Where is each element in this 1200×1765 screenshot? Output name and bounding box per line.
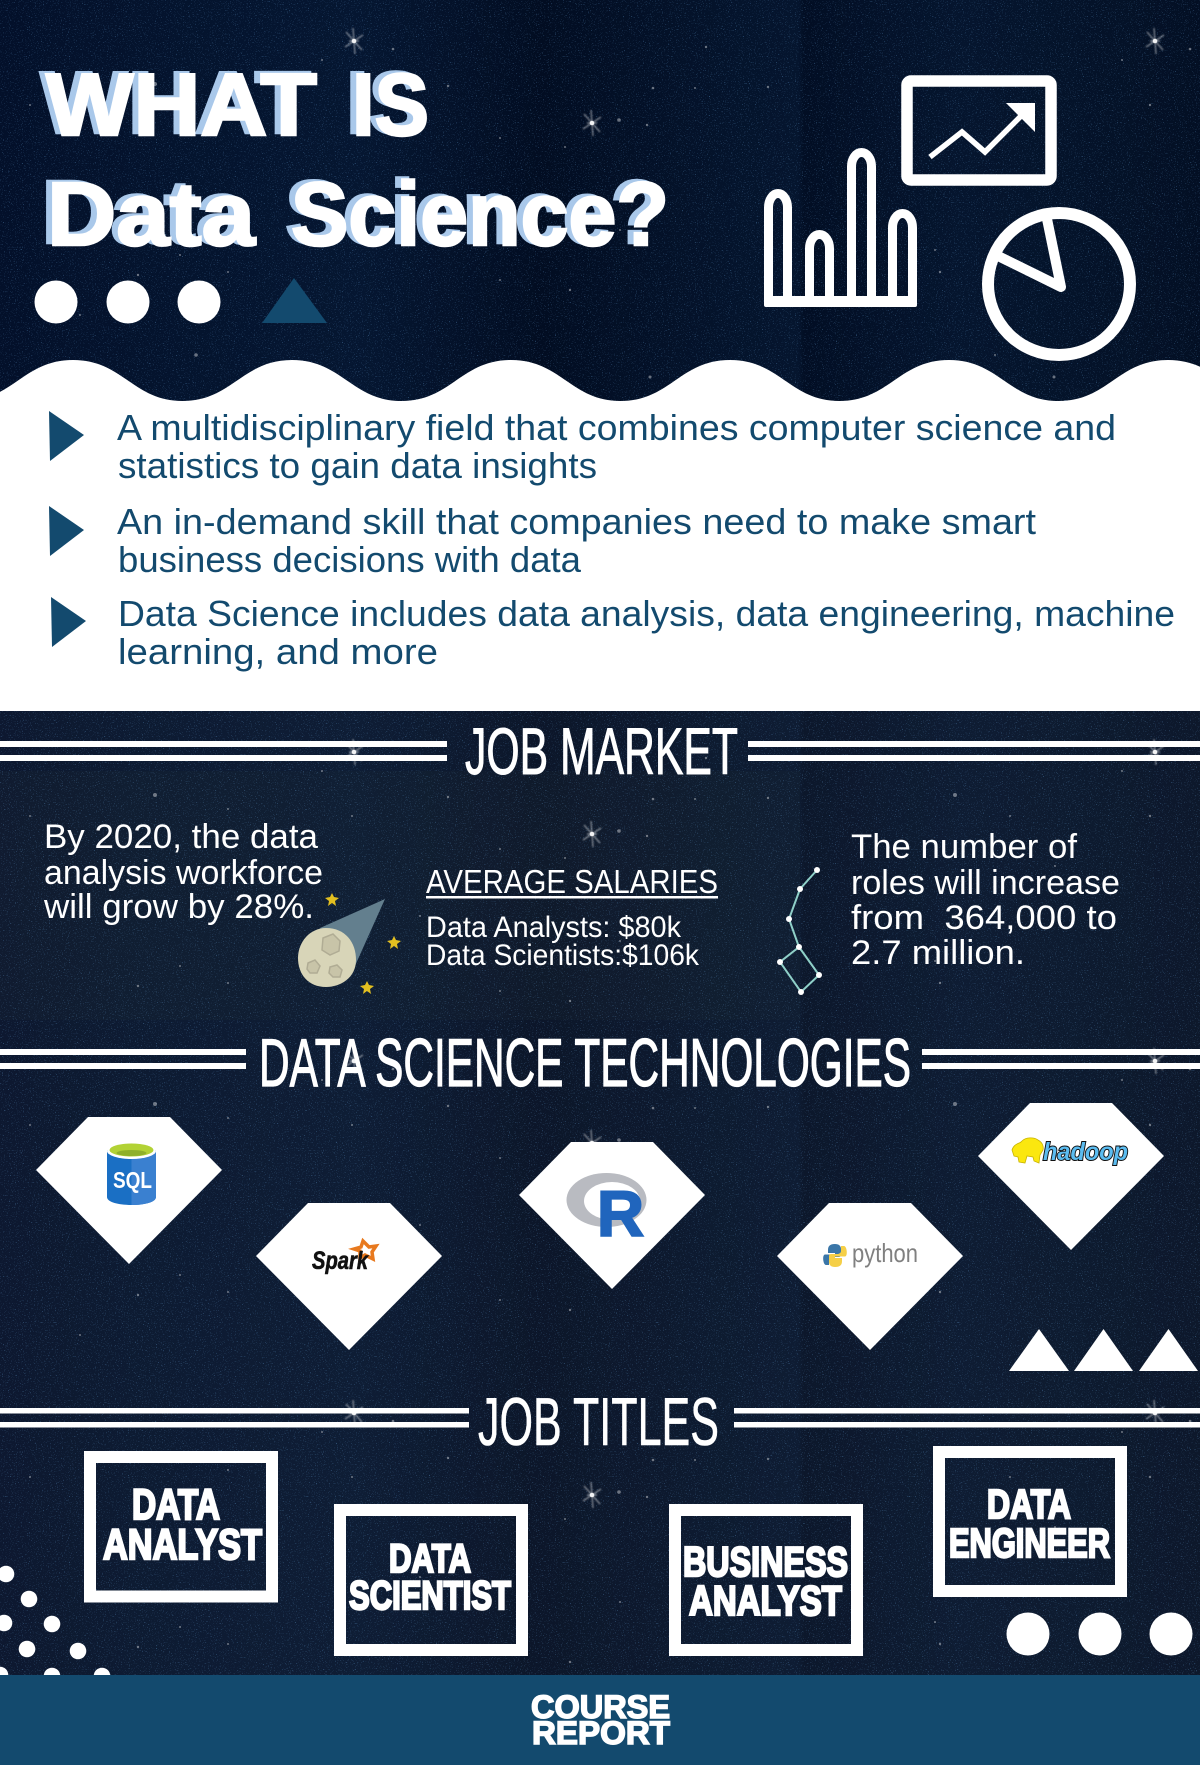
bullet 3: learning, and more xyxy=(118,631,438,672)
bullet 2: An in-demand skill that companies need to make smart xyxy=(117,501,1036,542)
title xyxy=(46,55,669,265)
decorative dots: bottom right xyxy=(1006,1612,1192,1656)
tech diamond: hadoop: hadoop xyxy=(1043,1138,1128,1166)
title: Data xyxy=(47,165,256,265)
average salaries: Data Analysts: $80k xyxy=(426,911,682,944)
icon: constellation xyxy=(777,867,822,995)
logo: course report: COURSE xyxy=(531,1689,670,1725)
heading: job titles: JOB TITLES xyxy=(478,1384,719,1460)
text: roles growth: 2.7 million. xyxy=(851,934,1025,972)
decorative triangles xyxy=(1009,1329,1198,1371)
bullet list xyxy=(49,407,1175,672)
text: roles growth: from 364,000 to xyxy=(851,899,1117,937)
job title: business analyst: BUSINESS xyxy=(683,1538,848,1585)
icon: comet xyxy=(298,893,401,994)
bullet 2: business decisions with data xyxy=(118,539,582,580)
title: Science? xyxy=(291,165,669,265)
job title: business analyst xyxy=(675,1510,857,1650)
tech diamond: python xyxy=(777,1203,963,1350)
bullet 1: A multidisciplinary field that combines computer science and xyxy=(117,407,1116,448)
white intro panel with wave edge xyxy=(0,360,1200,711)
job title: data scientist: SCIENTIST xyxy=(349,1574,511,1618)
job title: data engineer: DATA xyxy=(987,1481,1071,1527)
tech diamond: python: python xyxy=(852,1238,918,1268)
heading: job market xyxy=(0,714,1200,788)
job title: data analyst xyxy=(90,1457,272,1596)
tech diamond: Spark xyxy=(256,1203,442,1350)
tech diamond: R xyxy=(519,1142,705,1289)
icon: line chart monitor xyxy=(907,81,1051,180)
text: roles growth: The number of xyxy=(851,828,1078,866)
job title: business analyst: ANALYST xyxy=(689,1577,842,1624)
heading: job titles xyxy=(0,1384,1200,1460)
title: WHAT xyxy=(46,55,317,154)
logo: course report xyxy=(531,1689,670,1751)
text: workforce growth: will grow by 28%. xyxy=(43,888,314,926)
tech diamond: SQL xyxy=(36,1117,222,1264)
decorative dots: bottom left xyxy=(0,1566,110,1684)
heading: job market: JOB MARKET xyxy=(465,714,738,788)
bullet 3 xyxy=(51,593,1175,672)
tech diamond: SQL: SQL xyxy=(113,1167,152,1193)
bullet 3: Data Science includes data analysis, data engineering, machine xyxy=(118,593,1175,634)
text: roles growth xyxy=(851,828,1120,972)
icon: bar chart xyxy=(764,152,917,307)
icon: pie chart xyxy=(988,213,1130,355)
job title: data analyst: DATA xyxy=(132,1481,220,1529)
bullet 1: statistics to gain data insights xyxy=(118,445,597,486)
tech diamond: R: R xyxy=(597,1178,644,1250)
tech diamond: hadoop xyxy=(978,1103,1164,1250)
job title: data engineer xyxy=(939,1452,1121,1591)
job title: data scientist xyxy=(340,1510,522,1650)
average salaries: Data Scientists:$106k xyxy=(426,939,700,972)
footer band xyxy=(0,1675,1200,1765)
text: workforce growth: By 2020, the data xyxy=(44,818,318,856)
average salaries: AVERAGE SALARIES xyxy=(426,863,718,900)
job title: data scientist: DATA xyxy=(389,1537,471,1581)
decorative dots and triangle xyxy=(34,278,327,324)
bullet 1 xyxy=(49,407,1116,486)
job title: data engineer: ENGINEER xyxy=(949,1520,1110,1566)
title: IS xyxy=(352,55,429,154)
text: workforce growth xyxy=(43,818,323,926)
logo: course report: REPORT xyxy=(532,1715,670,1751)
text: roles growth: roles will increase xyxy=(851,864,1120,902)
job title: data analyst: ANALYST xyxy=(103,1521,262,1569)
bullet 2 xyxy=(49,501,1036,580)
tech diamond: Spark: Spark xyxy=(312,1247,369,1275)
average salaries xyxy=(426,863,718,972)
text: workforce growth: analysis workforce xyxy=(44,854,323,892)
